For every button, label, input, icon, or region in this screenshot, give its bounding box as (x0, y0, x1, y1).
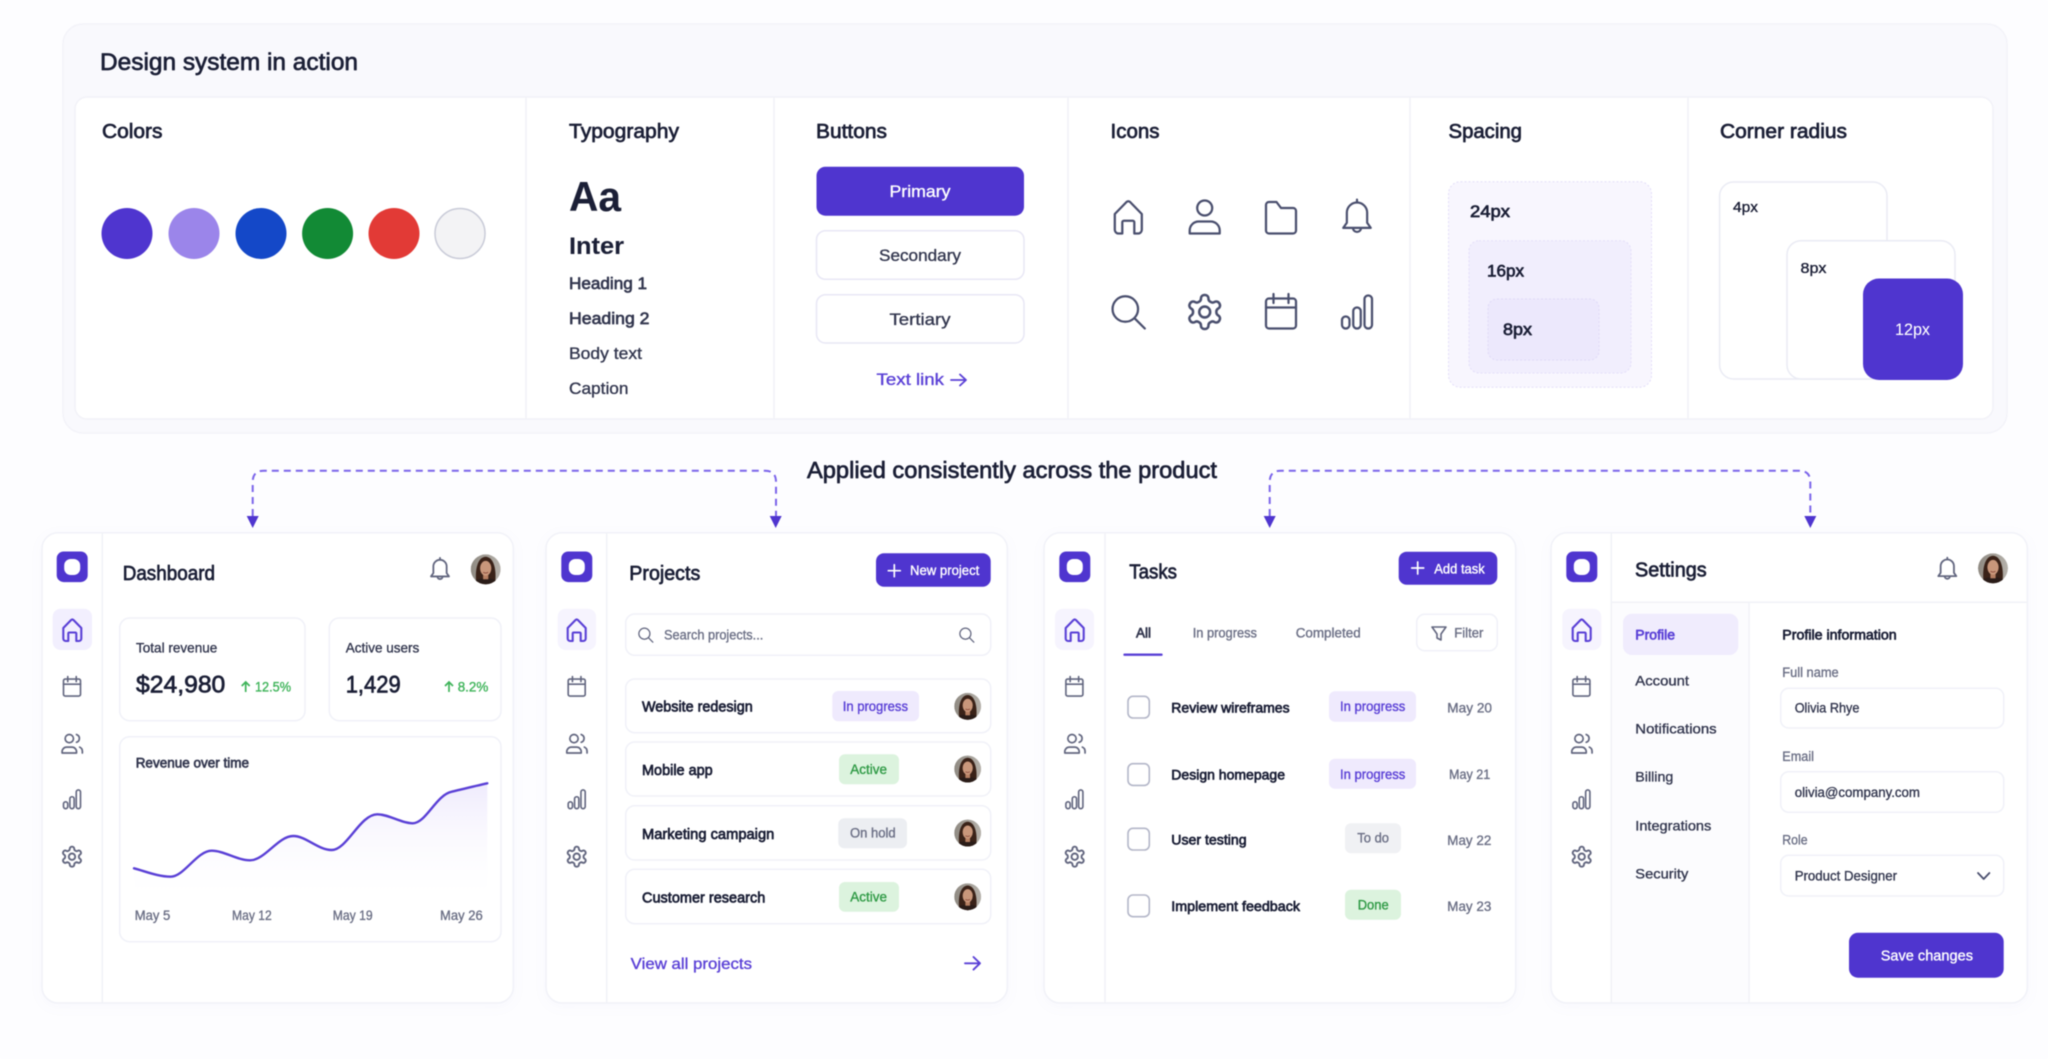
button: secondary (816, 231, 1024, 279)
button: tertiary (816, 295, 1024, 343)
project row: marketing campaign: On hold (850, 826, 896, 841)
button: primary: Primary (890, 182, 951, 201)
button: primary (816, 167, 1024, 216)
project row: mobile app: Active (850, 762, 887, 777)
panel: buttons (816, 121, 1024, 389)
button: secondary: Secondary (879, 246, 961, 265)
stat card: total revenue: 12.5% (255, 679, 291, 695)
settings sub-navigation: Account (1635, 672, 1689, 688)
filter tabs: Completed (1296, 625, 1361, 640)
project row: customer research (626, 869, 991, 924)
spacing box 16px (1469, 241, 1631, 373)
search field: Search projects... (664, 627, 763, 642)
search field (626, 614, 991, 655)
icon: bar chart (1342, 296, 1372, 328)
task row: review wireframes: In progress (1340, 699, 1406, 714)
line chart (134, 783, 487, 900)
task row: user testing: To do (1357, 831, 1389, 846)
panel: projects screen (546, 533, 1007, 1003)
button: filter (1417, 614, 1497, 651)
task row: implement feedback: Implement feedback (1171, 898, 1301, 914)
stat card: total revenue: Total revenue (136, 640, 217, 656)
heading: typography: Typography (569, 121, 679, 143)
task row: user testing: May 22 (1447, 832, 1491, 848)
arrow: right dashed connector (1264, 471, 1816, 528)
icon: home (1115, 201, 1142, 234)
settings sub-navigation: Profile (1635, 626, 1675, 642)
filter tabs: All (1136, 625, 1151, 640)
project row: customer research: Customer research (642, 891, 765, 907)
inner white card (75, 97, 1993, 419)
task row: implement feedback (1128, 890, 1491, 920)
field: full name: Full name (1782, 665, 1839, 680)
task row: implement feedback: May 23 (1447, 898, 1491, 914)
text link with arrow (876, 370, 966, 389)
project row: marketing campaign: Marketing campaign (642, 827, 774, 843)
avatar (1978, 553, 2008, 584)
filter tabs: In progress (1193, 625, 1257, 640)
chart axis labels (135, 907, 483, 923)
panel: icons (1110, 121, 1372, 329)
project row: website redesign (626, 679, 991, 733)
icon: calendar (1266, 294, 1296, 328)
link: view all projects (631, 956, 980, 973)
chart card: revenue over time (120, 737, 501, 942)
task row: user testing: User testing (1171, 832, 1247, 848)
icon: bell (431, 558, 449, 579)
icon: settings gear (1189, 295, 1220, 329)
field: role: Role (1782, 832, 1808, 847)
panel: design system in action (63, 24, 2007, 433)
heading: tasks: Tasks (1129, 561, 1177, 583)
chart card: revenue over time: Revenue over time (136, 754, 249, 770)
icon: folder (1266, 202, 1296, 234)
filter tabs (1123, 625, 1361, 656)
icon: user (1190, 200, 1220, 234)
heading: settings: Settings (1635, 560, 1707, 582)
icon: bell (1343, 200, 1371, 232)
type sample Inter: Inter (569, 233, 624, 260)
stat card: active users: 1,429 (346, 671, 401, 698)
button: tertiary: Tertiary (890, 310, 951, 329)
chart axis labels: May 12 (232, 907, 272, 923)
project row: website redesign: In progress (843, 699, 908, 714)
field: full name: Olivia Rhye (1795, 700, 1860, 716)
icon: search (1113, 296, 1145, 328)
settings sub-navigation: Notifications (1635, 720, 1717, 736)
heading: colors: Colors (102, 121, 162, 143)
panel: tasks screen (1044, 533, 1516, 1003)
field: email (1781, 749, 2004, 812)
heading: icons: Icons (1110, 121, 1160, 143)
heading: spacing: Spacing (1448, 121, 1522, 143)
stat card: active users (329, 618, 501, 721)
field: full name (1781, 665, 2004, 728)
radius sample 8px (1787, 241, 1955, 379)
button: new project: New project (910, 563, 980, 578)
spacing box 16px: 16px (1487, 262, 1524, 281)
button: add task (1399, 552, 1497, 585)
button: save changes: Save changes (1881, 948, 1973, 965)
field: email: olivia@company.com (1795, 784, 1920, 800)
settings sub-navigation: Security (1635, 865, 1688, 881)
type scale list (569, 274, 650, 398)
type scale list: Heading 1 (569, 274, 647, 293)
settings sub-navigation: Billing (1635, 769, 1673, 785)
radius sample 8px: 8px (1800, 260, 1827, 277)
chart axis labels: May 26 (440, 907, 483, 923)
project row: mobile app: Mobile app (642, 763, 713, 779)
settings sub-navigation (1623, 614, 1738, 881)
type scale list: Heading 2 (569, 309, 650, 328)
avatar (471, 554, 501, 585)
radius sample 4px: 4px (1733, 199, 1759, 216)
task row: review wireframes: Review wireframes (1171, 699, 1290, 715)
project row: marketing campaign (626, 806, 991, 860)
task row: design homepage (1128, 759, 1490, 789)
stat card: active users: 8.2% (458, 679, 488, 695)
button: save changes (1849, 933, 2004, 978)
sidebar navigation (1562, 552, 1601, 867)
field: email: Email (1782, 749, 1814, 764)
task row: design homepage: May 21 (1449, 766, 1490, 782)
heading: dashboard: Dashboard (123, 563, 215, 585)
task row: design homepage: Design homepage (1171, 767, 1285, 783)
heading: corner radius: Corner radius (1720, 121, 1847, 143)
panel: settings screen (1551, 533, 2027, 1003)
sidebar navigation (558, 552, 596, 867)
chart axis labels: May 5 (135, 907, 170, 923)
button: new project (876, 553, 991, 587)
type scale list: Caption (569, 379, 628, 398)
field: role (1781, 832, 2004, 896)
panel: dashboard screen (42, 533, 513, 1003)
panel: corner radius (1720, 121, 1963, 380)
chart axis labels: May 19 (333, 907, 373, 923)
stat card: total revenue: $24,980 (136, 671, 225, 698)
sidebar navigation (1055, 552, 1094, 867)
spacing box 24px: 24px (1470, 202, 1511, 221)
title: Design system in action (100, 49, 358, 76)
button: filter: Filter (1454, 625, 1484, 640)
radius sample 12px (1863, 278, 1963, 380)
subtitle: Applied consistently across the product (807, 457, 1218, 483)
project row: mobile app (626, 742, 991, 796)
heading: projects: Projects (629, 563, 700, 585)
task row: review wireframes: May 20 (1447, 699, 1492, 715)
button: add task: Add task (1434, 561, 1485, 576)
icon: bell (1938, 558, 1956, 579)
project row: website redesign: Website redesign (642, 700, 753, 716)
sidebar navigation (53, 552, 92, 867)
stat card: active users: Active users (346, 640, 419, 656)
project row: customer research: Active (850, 890, 887, 905)
panel: spacing (1448, 121, 1652, 387)
task row: user testing (1128, 823, 1491, 853)
radius sample 4px (1720, 182, 1887, 379)
task row: design homepage: In progress (1340, 767, 1406, 782)
field: role: Product Designer (1795, 868, 1897, 884)
radius sample 12px: 12px (1895, 320, 1930, 339)
type sample Aa: Aa (569, 173, 622, 220)
link: view all projects: View all projects (631, 956, 752, 973)
panel: typography (569, 121, 679, 398)
profile form (1781, 626, 2004, 978)
arrow: left dashed connector (247, 471, 782, 528)
task row: implement feedback: Done (1358, 897, 1389, 912)
spacing box 24px (1448, 182, 1652, 387)
type scale list: Body text (569, 344, 642, 363)
settings sub-navigation: Integrations (1635, 817, 1711, 833)
task row: review wireframes (1128, 691, 1492, 722)
profile form: Profile information (1782, 626, 1897, 642)
heading: buttons: Buttons (816, 121, 887, 143)
spacing box 8px (1488, 299, 1599, 360)
color swatches (102, 208, 485, 259)
spacing box 8px: 8px (1503, 320, 1533, 339)
text link with arrow: Text link (876, 370, 945, 389)
panel: colors (102, 121, 485, 259)
stat card: total revenue (120, 618, 305, 721)
